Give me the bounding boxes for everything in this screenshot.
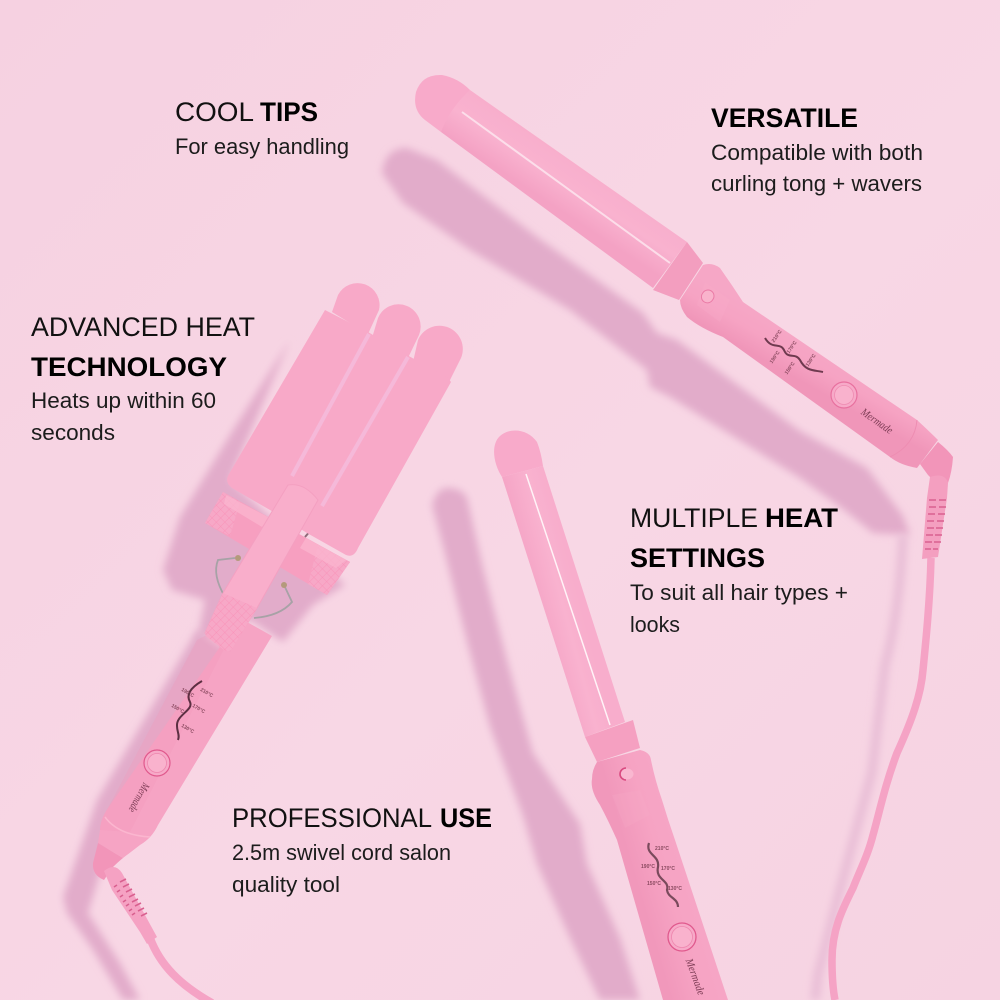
- temperature wave: [765, 329, 823, 376]
- switch button: [699, 288, 716, 305]
- power button: [831, 382, 857, 408]
- grip facets: [697, 282, 730, 322]
- description: To suit all hair types +: [630, 580, 848, 605]
- temperature wave: 150°C: [647, 881, 661, 887]
- grip facets: [612, 790, 650, 828]
- temperature wave: 210°C: [199, 687, 214, 699]
- brand signature: Mermade: [682, 956, 707, 997]
- heading: COOL: [175, 97, 254, 127]
- text: advanced heat technology: [31, 312, 255, 445]
- barrel: [502, 466, 625, 737]
- handle end ring: [890, 420, 917, 457]
- cable: waver cord, bottom left: [150, 938, 212, 1000]
- temperature wave: 190°C: [641, 864, 655, 870]
- curling tong: lower centre: [494, 430, 728, 1000]
- temperature wave: 150°C: [170, 703, 185, 715]
- barrel tip: [415, 75, 470, 132]
- temperature wave: 210°C: [771, 329, 784, 344]
- clamp arm: [205, 485, 318, 651]
- heading: [630, 503, 839, 573]
- temperature wave: [641, 843, 682, 907]
- shadows cast by the three tools: [63, 148, 910, 1000]
- handle: [592, 750, 728, 1000]
- description: quality tool: [232, 872, 340, 897]
- barrel covers: [227, 310, 451, 556]
- temperature wave: 170°C: [191, 703, 206, 715]
- temperature wave: 170°C: [786, 340, 799, 355]
- description: [630, 580, 848, 637]
- temperature wave: 130°C: [668, 886, 682, 892]
- temperature wave: 190°C: [769, 350, 782, 365]
- silver clamp rings: [216, 555, 292, 618]
- handle end ring: [105, 817, 150, 837]
- description: [232, 840, 451, 897]
- barrel collar: [653, 242, 703, 300]
- description: Compatible with both: [711, 140, 923, 165]
- curling tong: upper right: [415, 75, 953, 483]
- handle: [680, 264, 938, 468]
- base bar: [205, 492, 350, 595]
- barrel tip: [494, 430, 543, 477]
- power button: [144, 750, 170, 776]
- barrel highlight: [526, 474, 610, 725]
- heading: MULTIPLE: [630, 503, 758, 533]
- text: multiple heat settings: [630, 503, 848, 637]
- strain relief: curling tong cord: [922, 475, 948, 559]
- temperature wave: [170, 681, 214, 740]
- text: cool tips: [175, 97, 349, 159]
- brand signature: Mermade: [858, 406, 895, 437]
- description: [711, 140, 923, 196]
- heading: ADVANCED HEAT: [31, 312, 255, 342]
- switch button: [620, 768, 634, 780]
- heading: VERSATILE: [711, 103, 858, 133]
- temperature wave: 210°C: [655, 846, 669, 852]
- description: 2.5m swivel cord salon: [232, 840, 451, 865]
- text: versatile: [711, 103, 923, 196]
- description: [31, 388, 216, 445]
- description: seconds: [31, 420, 115, 445]
- heading: PROFESSIONAL: [232, 803, 432, 833]
- heading: [31, 312, 255, 382]
- waver neck and strain relief: [93, 843, 157, 944]
- description: curling tong + wavers: [711, 171, 922, 196]
- heading: TECHNOLOGY: [31, 352, 227, 382]
- neck: [920, 442, 953, 483]
- heading: HEAT: [765, 503, 839, 533]
- waver handle: [98, 618, 272, 858]
- description: For easy handling: [175, 134, 349, 159]
- barrel highlight: [462, 112, 670, 263]
- clamp paddle: [205, 593, 257, 651]
- barrel tips: [332, 283, 463, 382]
- brand signature: Mermade: [126, 780, 152, 814]
- description: looks: [630, 612, 680, 637]
- temperature wave: 190°C: [180, 687, 195, 699]
- temperature wave: 130°C: [180, 723, 195, 735]
- heading: SETTINGS: [630, 543, 765, 573]
- three barrel waver: [93, 283, 463, 944]
- barrel: [441, 90, 687, 288]
- dividers: [292, 334, 408, 506]
- heading: USE: [440, 803, 492, 833]
- description: Heats up within 60: [31, 388, 216, 413]
- temperature wave: 130°C: [805, 353, 818, 368]
- text: professional use: [232, 803, 492, 897]
- heading: TIPS: [260, 97, 318, 127]
- temperature wave: 170°C: [661, 866, 675, 872]
- cable: curling tong cord, right: [832, 558, 931, 1000]
- temperature wave: 150°C: [784, 361, 797, 376]
- barrel collar: [585, 720, 640, 762]
- power button: [668, 923, 696, 951]
